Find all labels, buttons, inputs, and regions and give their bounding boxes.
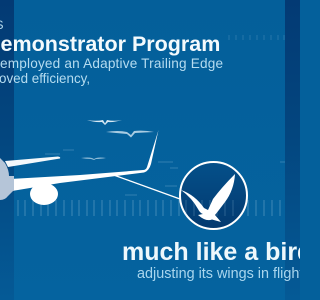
far wing (5, 156, 60, 167)
fuselage (0, 158, 14, 200)
closing subtext: adjusting its wings in flight (137, 266, 300, 282)
near wing with winglet (10, 130, 158, 191)
circle ticks (186, 200, 233, 216)
faint horizontal streaks (45, 150, 285, 195)
bird 2 (106, 131, 154, 138)
engine (30, 183, 58, 205)
tick ruler: upper (229, 35, 284, 40)
icon: white bird (181, 174, 235, 222)
bird 1 (87, 120, 122, 125)
tick ruler: lower (18, 200, 280, 216)
airplane illustration (0, 130, 180, 205)
body line 2: oved efficiency, (0, 71, 90, 86)
right side band (285, 0, 300, 300)
left side band (0, 0, 14, 300)
birds in flight (81, 120, 154, 160)
trailing edge leader line (115, 176, 180, 199)
circle (180, 162, 247, 229)
body line 1: employed an Adaptive Trailing Edge (0, 56, 223, 71)
bird 3 (81, 158, 106, 160)
heading (0, 18, 223, 86)
magnified bird callout (180, 162, 247, 229)
